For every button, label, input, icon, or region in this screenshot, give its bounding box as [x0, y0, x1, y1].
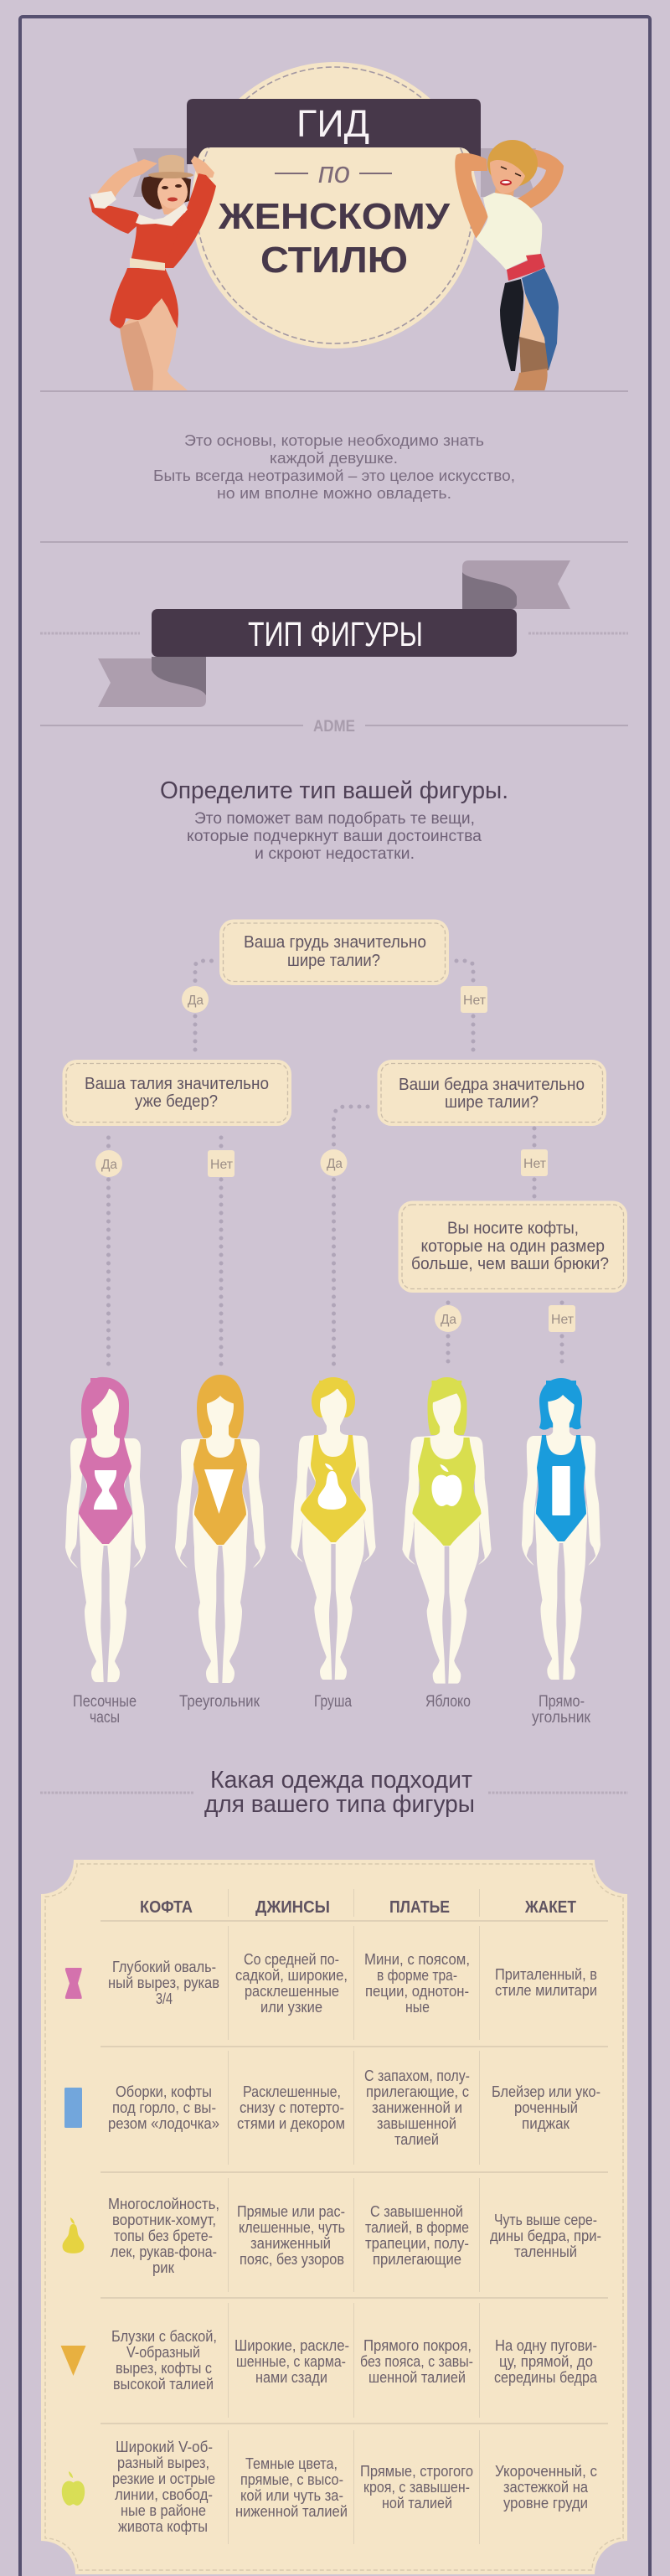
caption: pear: Груша [314, 1693, 352, 1711]
ADME divider: ADME [313, 718, 355, 736]
figure: pear [291, 1377, 376, 1680]
cell: jacket: застежкой на [503, 2479, 589, 2496]
icon: pear [63, 2217, 84, 2253]
no badge 4 [549, 1305, 575, 1332]
cell: dress: С завышенной [370, 2203, 463, 2220]
cell: jacket: стиле милитари [495, 1982, 597, 1999]
cell: top: 3/4 [156, 1990, 173, 2007]
cell: dress: завышенной [377, 2115, 456, 2132]
cell: jeans: заниженный [250, 2235, 331, 2252]
figure: triangle [175, 1375, 265, 1683]
title banner [187, 99, 481, 164]
table row: rectangle [64, 2068, 600, 2148]
question box 3: шире талии? [445, 1093, 539, 1112]
caption: hourglass: Песочные [73, 1693, 137, 1711]
cell: jeans: стями и декором [237, 2115, 345, 2132]
cell: dress [365, 2203, 469, 2268]
cell: dress: ные [405, 1999, 430, 2016]
cell: top: разный вырез, [117, 2455, 209, 2471]
cell: top: живота кофты [118, 2518, 208, 2535]
intro text: каждой девушке. [270, 450, 398, 467]
ribbon tail left [98, 658, 206, 707]
intro text [153, 432, 515, 502]
cell: top: резкие и острые [112, 2470, 215, 2487]
cell: jacket: таленный [514, 2243, 577, 2260]
cell: jeans [235, 1951, 348, 2016]
header divider [40, 390, 628, 392]
cell: jeans: Со средней по- [244, 1951, 339, 1968]
cell: top [108, 1959, 219, 2007]
cell: top: Широкий V-об- [116, 2439, 213, 2455]
cell: top: топы без брете- [114, 2228, 213, 2244]
caption: rectangle: Прямо- [539, 1693, 585, 1711]
cell: top: Глубокий оваль- [112, 1959, 216, 1975]
table header: КОФТА [140, 1898, 193, 1917]
cell: top [108, 2196, 219, 2276]
cell: jeans: Расклешенные, [243, 2083, 341, 2100]
cell: jeans: кой или чуть за- [240, 2487, 343, 2504]
cell: dress: без пояса, с завы- [360, 2353, 473, 2370]
caption: rectangle [532, 1693, 591, 1727]
cell: jacket: Чуть выше сере- [494, 2212, 597, 2228]
cell: jeans [237, 2203, 345, 2268]
question box 3: Ваши бедра значительно [399, 1076, 585, 1094]
cell: top [112, 2439, 215, 2535]
table row: hourglass [65, 1951, 597, 2016]
figure: rectangle [522, 1378, 600, 1680]
cell: jacket [494, 2337, 598, 2386]
cell: top: Блузки с баской, [111, 2328, 217, 2345]
cell: jeans: или узкие [260, 1999, 322, 2016]
title word: female: ЖЕНСКОМУ [218, 196, 451, 237]
table row: triangle [60, 2328, 598, 2393]
caption: apple: Яблоко [425, 1693, 471, 1711]
cell: top: воротник-хомут, [112, 2212, 216, 2228]
cell: jeans: прямые, с высо- [240, 2471, 343, 2488]
no badge 4: Нет [551, 1313, 575, 1327]
cell: jeans: ниженной талией [235, 2503, 348, 2520]
table header: ПЛАТЬЕ [389, 1898, 450, 1917]
clothes heading: Какая одежда подходит [210, 1767, 472, 1794]
title word: guide: ГИД [296, 102, 369, 145]
cell: dress: прилегающие [373, 2251, 461, 2268]
ribbon tail right [462, 560, 570, 609]
caption: triangle: Треугольник [179, 1693, 260, 1711]
icon: rectangle [64, 2088, 82, 2128]
icon: apple [62, 2471, 85, 2506]
cell: dress: трапеции, полу- [365, 2235, 469, 2252]
cell: dress [364, 1951, 470, 2016]
cell: top: Многослойность, [108, 2196, 219, 2212]
ribbon tails behind title [133, 148, 536, 197]
question box 2: уже бедер? [135, 1092, 218, 1111]
cell: jeans: пояс, без узоров [240, 2251, 344, 2268]
yes badge 1 [182, 986, 209, 1013]
question box 1: Ваша грудь значительно [244, 933, 426, 952]
cell: jacket: пиджак [522, 2115, 570, 2132]
intro text: но им вполне можно овладеть. [217, 485, 451, 502]
yes badge 3: Да [327, 1157, 343, 1171]
no badge 2 [208, 1150, 234, 1177]
no badge 1 [461, 986, 487, 1013]
yes badge 2 [95, 1150, 122, 1177]
question subheading: и скроют недостатки. [255, 845, 415, 863]
cell: jeans [237, 2083, 345, 2132]
cell: jacket [490, 2212, 601, 2260]
question heading: Определите тип вашей фигуры. [160, 777, 508, 804]
figure: apple [402, 1377, 492, 1684]
table row: pear [63, 2196, 601, 2276]
cell: jacket: Укороченный, с [495, 2463, 597, 2480]
clothes table card [41, 1860, 627, 2574]
figure: hourglass [65, 1377, 146, 1682]
no badge 3: Нет [523, 1157, 547, 1171]
cell: jeans [234, 2337, 349, 2386]
cell: dress: кроя, с завышен- [363, 2479, 470, 2496]
cell: top: ный вырез, рукав [108, 1975, 219, 1991]
cell: top: вырез, кофты с [116, 2360, 212, 2377]
cell: jacket: На одну пугови- [495, 2337, 597, 2354]
cell: jacket: уровне груди [503, 2495, 588, 2511]
yes badge 4 [435, 1305, 461, 1332]
cell: top: ные в районе [121, 2502, 206, 2519]
cell: jeans: Темные цвета, [245, 2455, 338, 2472]
pin-up woman in white blouse [455, 140, 564, 391]
title word: style: СТИЛЮ [260, 240, 408, 281]
cell: dress [364, 2068, 470, 2148]
cell: jacket: цу, прямой, до [499, 2353, 593, 2370]
question box 4: которые на один размер [420, 1237, 605, 1256]
cell: jacket: Блейзер или уко- [492, 2083, 600, 2100]
yes badge 2: Да [101, 1158, 117, 1172]
cell: jeans: расклешенные [245, 1983, 339, 2000]
yes badge 4: Да [441, 1313, 456, 1327]
cell: top [108, 2083, 219, 2132]
icon: hourglass [65, 1968, 82, 1999]
intro text: Это основы, которые необходимо знать [184, 432, 484, 449]
cell: dress: ной талией [382, 2495, 452, 2511]
cell: top: высокой талией [113, 2376, 214, 2393]
cell: dress: Мини, с поясом, [364, 1951, 470, 1968]
title word: po [275, 155, 392, 189]
cell: dress: талией [394, 2131, 439, 2148]
cell: jeans: Широкие, раскле- [234, 2337, 349, 2354]
cell: jacket [492, 2083, 600, 2132]
yes badge 1: Да [188, 994, 204, 1008]
table header [140, 1898, 576, 1917]
cell: jeans [235, 2455, 348, 2520]
cell: jeans: Прямые или рас- [237, 2203, 345, 2220]
cell: jeans: снизу с потерто- [240, 2099, 344, 2116]
cell: top: V-образный [126, 2344, 200, 2361]
pin-up woman in red dress [89, 155, 216, 391]
cell: dress: талией, в форме [365, 2219, 469, 2236]
cell: top: лек, рукав-фона- [111, 2243, 217, 2260]
cell: jacket: середины бедра [494, 2369, 598, 2386]
cell: top: резом «лодочка» [108, 2115, 219, 2132]
cell: jacket: дины бедра, при- [490, 2228, 601, 2244]
caption: hourglass: часы [90, 1709, 120, 1727]
icon: triangle [60, 2346, 85, 2376]
cell: top: Оборки, кофты [116, 2083, 212, 2100]
question subheading: Это поможет вам подобрать те вещи, [194, 810, 475, 828]
cell: dress: в форме тра- [377, 1967, 457, 1984]
question box 1: шире талии? [287, 952, 380, 970]
cell: dress: заниженной и [372, 2099, 462, 2116]
cell: top: рик [152, 2259, 174, 2276]
title badge [133, 62, 536, 348]
cell: dress: Прямые, строгого [360, 2463, 473, 2480]
question box 3 [377, 1060, 606, 1126]
connector dots [109, 961, 562, 1365]
cell: jeans: шенные, с карма- [236, 2353, 346, 2370]
flowchart [62, 920, 627, 1365]
cell: jacket [495, 2463, 597, 2511]
ribbon heading: ТИП ФИГУРЫ [248, 615, 423, 653]
cell: dress: шенной талией [368, 2369, 466, 2386]
table header: ДЖИНСЫ [255, 1898, 330, 1917]
cell: dress: С запахом, полу- [364, 2068, 470, 2084]
question box 4 [399, 1201, 627, 1293]
cell: dress [360, 2463, 473, 2511]
cell: jeans: нами сзади [255, 2369, 327, 2386]
question box 2: Ваша талия значительно [85, 1075, 269, 1093]
caption: hourglass [73, 1693, 137, 1727]
no badge 3 [521, 1149, 548, 1176]
section ribbon [98, 560, 570, 707]
question subheading: которые подчеркнут ваши достоинства [187, 828, 482, 845]
cell: jacket [495, 1966, 597, 1999]
cell: top: линии, свобод- [115, 2486, 213, 2503]
cell: dress: пеции, однотон- [365, 1983, 469, 2000]
section divider [40, 541, 628, 543]
cell: jacket: Приталенный, в [495, 1966, 597, 1983]
table header: ЖАКЕТ [524, 1898, 576, 1917]
cell: top [111, 2328, 217, 2393]
question box 4: Вы носите кофты, [447, 1220, 579, 1238]
clothes heading [204, 1767, 475, 1818]
intro text: Быть всегда неотразимой – это целое искусство, [153, 467, 515, 484]
cell: dress [360, 2337, 473, 2386]
cell: dress: прилегающие, с [366, 2083, 469, 2100]
clothes heading: для вашего типа фигуры [204, 1791, 475, 1818]
no badge 1: Нет [463, 994, 487, 1008]
no badge 2: Нет [210, 1158, 234, 1172]
cell: jeans: садкой, широкие, [235, 1967, 348, 1984]
cell: jacket: роченный [514, 2099, 578, 2116]
figure captions [73, 1693, 591, 1727]
question box 1 [219, 920, 449, 985]
cell: top: под горло, с вы- [112, 2099, 216, 2116]
table row: apple [62, 2439, 597, 2535]
ribbon main bar [152, 609, 517, 657]
cell: jeans: клешенные, чуть [239, 2219, 345, 2236]
question subheading [187, 810, 482, 863]
cell: dress: Прямого покроя, [363, 2337, 472, 2354]
title word: po: по [318, 155, 350, 189]
question box 2 [62, 1060, 291, 1126]
caption: rectangle: угольник [532, 1709, 591, 1727]
question box 4: больше, чем ваши брюки? [411, 1255, 609, 1273]
yes badge 3 [320, 1149, 347, 1176]
